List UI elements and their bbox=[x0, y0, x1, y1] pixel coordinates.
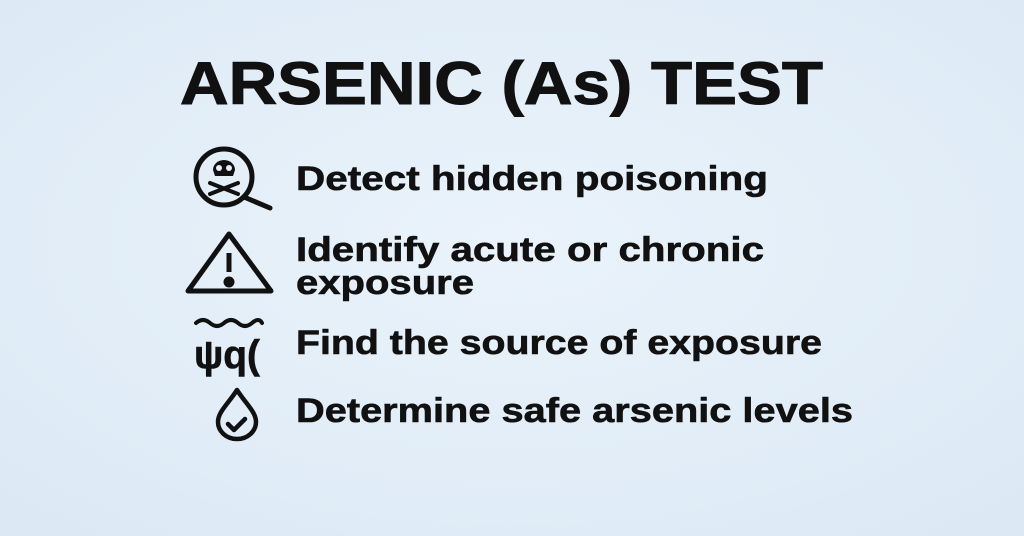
item 3: find the source: Find the source of exposure bbox=[296, 324, 822, 362]
icon: drop with check bbox=[218, 390, 256, 439]
item 4: determine safe levels bbox=[218, 390, 853, 439]
item 2: identify exposure bbox=[188, 231, 764, 302]
title: ARSENIC (As) TEST bbox=[180, 50, 823, 117]
item 4: determine safe levels: Determine safe arsenic levels bbox=[296, 392, 853, 430]
item 3: find the source: ψq( bbox=[194, 333, 261, 377]
item 1: detect hidden poisoning bbox=[196, 149, 768, 208]
item 2: identify exposure: Identify acute or chronic bbox=[296, 231, 764, 269]
item 2: identify exposure: exposure bbox=[296, 264, 474, 302]
item 3: find the source bbox=[194, 320, 822, 377]
icon: water waves and symbols bbox=[196, 320, 262, 326]
item 1: detect hidden poisoning: Detect hidden poisoning bbox=[296, 160, 768, 198]
icon: magnifier with skull bbox=[196, 149, 270, 208]
icon: warning triangle bbox=[188, 234, 271, 291]
